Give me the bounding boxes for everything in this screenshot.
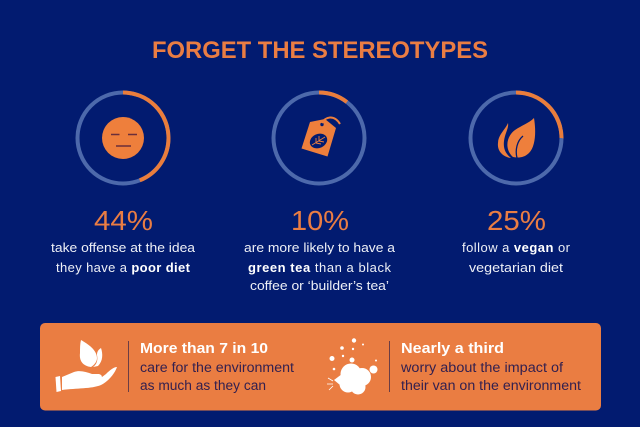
description: poor diet: they have a poor diet [56,260,191,275]
callout text: van impact: worry about the impact of [400,360,563,375]
description: green tea: are more likely to have a [244,240,396,255]
donut ring: 44% [78,92,168,184]
percentage: 44%: 44% [94,205,153,236]
divider [388,341,390,392]
icon: tea tag [302,117,340,156]
panel: 44 percent stat [51,92,196,275]
panel: 10 percent stat [244,92,396,293]
divider [128,341,130,392]
callout text: care for the environment [140,340,294,393]
description: vegan: vegetarian diet [469,260,563,275]
icon: hand holding leaves [56,340,117,392]
icon: exhaust cloud [327,338,378,394]
callout text: van impact: Nearly a third [401,340,504,357]
icon: leaves [498,118,535,158]
description: green tea: green tea than a black [248,260,392,275]
panel: orange callout bar [40,323,601,410]
icon: neutral face [102,117,144,159]
donut ring: 25% [470,92,562,184]
donut ring: 10% [274,92,364,184]
description: green tea [244,240,396,293]
percentage: 25%: 25% [487,205,546,236]
callout text: van impact [400,340,581,393]
callout text: care for the environment: as much as they can [140,378,266,393]
panel: 25 percent stat [462,92,571,275]
callout text: care for the environment: care for the environment [140,360,294,375]
percentage: 10%: 10% [291,205,349,236]
description: green tea: coffee or ‘builder’s tea’ [250,278,389,293]
description: poor diet [51,240,196,275]
callout text: care for the environment: More than 7 in 10 [140,340,268,357]
description: vegan: follow a vegan or [462,240,571,255]
description: poor diet: take offense at the idea [51,240,196,255]
callout text: van impact: their van on the environment [401,378,581,393]
description: vegan [462,240,571,275]
title: FORGET THE STEREOTYPES [152,37,488,64]
